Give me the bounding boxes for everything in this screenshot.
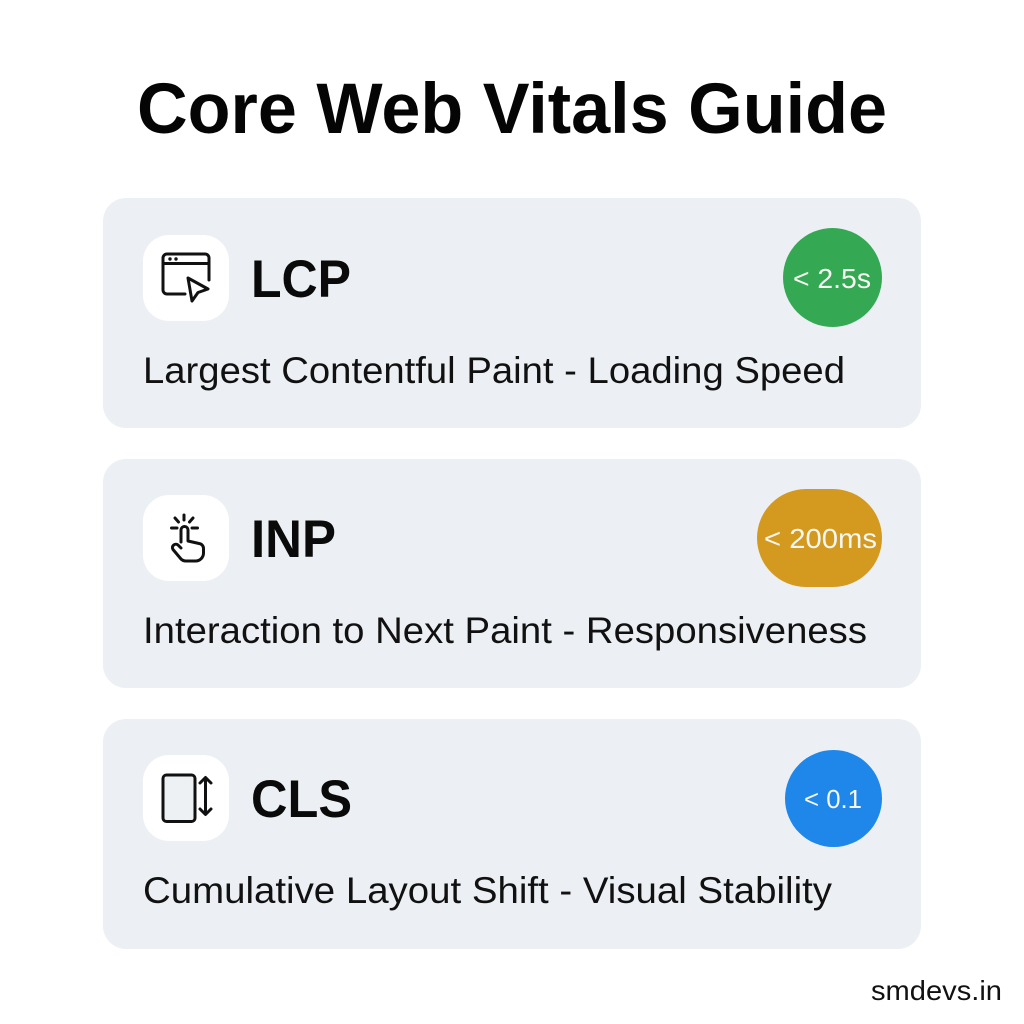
heading: INP: INP [251, 510, 336, 569]
description: CLS: Cumulative Layout Shift - Visual Stability [143, 870, 833, 911]
panel: CLS [103, 719, 921, 949]
heading: CLS: CLS [251, 770, 352, 829]
description: INP: Interaction to Next Paint - Responsiveness [143, 610, 867, 651]
title: Core Web Vitals Guide [137, 70, 887, 149]
icon: browser window with cursor [143, 235, 229, 321]
badge: INP threshold: < 200ms [764, 523, 877, 554]
badge: INP threshold [757, 489, 882, 587]
heading: LCP: LCP [251, 250, 351, 309]
footer credit: smdevs.in [871, 975, 1002, 1006]
icon: layout shift [143, 755, 229, 841]
description: LCP: Largest Contentful Paint - Loading Speed [143, 350, 845, 391]
badge: CLS threshold: < 0.1 [804, 784, 862, 814]
panel: LCP [103, 198, 921, 428]
icon: tapping hand [143, 495, 229, 581]
badge: CLS threshold [785, 750, 882, 847]
badge: LCP threshold [783, 228, 882, 327]
panel: INP [103, 459, 921, 688]
badge: LCP threshold: < 2.5s [793, 263, 871, 294]
